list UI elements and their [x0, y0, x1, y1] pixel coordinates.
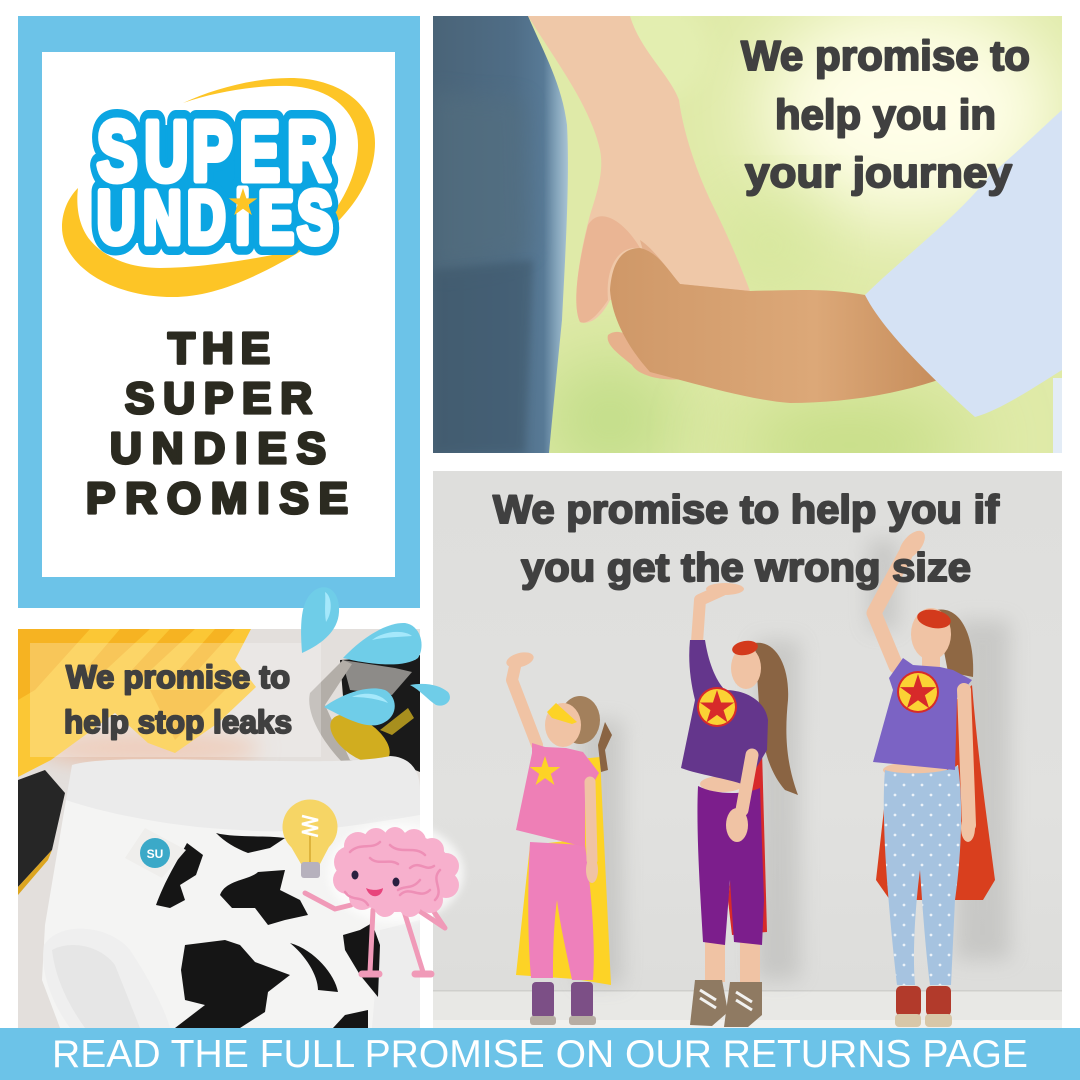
logo: Super Undies: SUPER: [97, 104, 331, 198]
camera-like wheel: [309, 655, 420, 773]
title: The Super Undies Promise: UNDIES: [110, 424, 326, 473]
cow spots: [156, 833, 380, 1028]
undies body: [42, 800, 420, 1028]
black toy: [18, 770, 65, 887]
undies waistband: [66, 756, 420, 831]
panel: logo and title: [18, 16, 420, 608]
caption: journey: [741, 32, 1030, 196]
caption: stop leaks: help stop leaks: [64, 704, 292, 740]
icon: water drops: [301, 587, 450, 725]
kid: violet with red-orange cape: [873, 526, 995, 1027]
caption: journey: your journey: [745, 149, 1013, 196]
caption: wrong size: [493, 488, 1000, 590]
jeans: [433, 16, 568, 453]
logo: Super Undies: [62, 78, 375, 297]
shoes: [532, 982, 554, 1018]
care tag: SU: [147, 847, 163, 861]
logo: Super Undies: UNDiES: [97, 176, 333, 259]
title: The Super Undies Promise: [86, 324, 348, 523]
caption: stop leaks: We promise to: [66, 659, 290, 695]
caption: wrong size: We promise to help you if: [493, 488, 1000, 532]
caption: journey: We promise to: [741, 32, 1030, 79]
icon: brain character: [305, 823, 464, 974]
panel: cow-print undies photo: [18, 587, 464, 1028]
child sleeve: [865, 110, 1062, 417]
kid: purple with red cape: [681, 583, 798, 1027]
title: The Super Undies Promise: THE: [168, 324, 270, 373]
child arm: [610, 248, 952, 403]
caption: stop leaks: [30, 643, 321, 757]
kid: pink with yellow cape: [505, 650, 612, 1025]
skirting board and floor: [433, 990, 1062, 1020]
leg hole: [43, 952, 44, 955]
care tag: [140, 838, 186, 868]
footer banner: READ THE FULL PROMISE ON OUR RETURNS PAGE: [52, 1033, 1028, 1076]
adult arm and hand: [528, 16, 750, 323]
title: The Super Undies Promise: PROMISE: [86, 474, 348, 523]
caption: wrong size: you get the wrong size: [521, 546, 971, 590]
caption: journey: help you in: [775, 91, 996, 138]
title: The Super Undies Promise: SUPER: [125, 374, 312, 423]
lower fingers: [608, 332, 678, 380]
icon: light bulb: [282, 800, 338, 878]
shoes: [690, 980, 728, 1026]
logo: Super Undies: SUPER: [97, 104, 331, 198]
panel: three superhero kids photo: [433, 471, 1062, 1028]
panel: holding hands photo: [433, 0, 1062, 480]
pink toy shadow: [40, 730, 260, 766]
yellow toy: [18, 629, 256, 777]
shoes: [896, 986, 921, 1016]
wall shadows: [578, 540, 1010, 985]
logo: Super Undies: UNDiES: [97, 176, 333, 259]
